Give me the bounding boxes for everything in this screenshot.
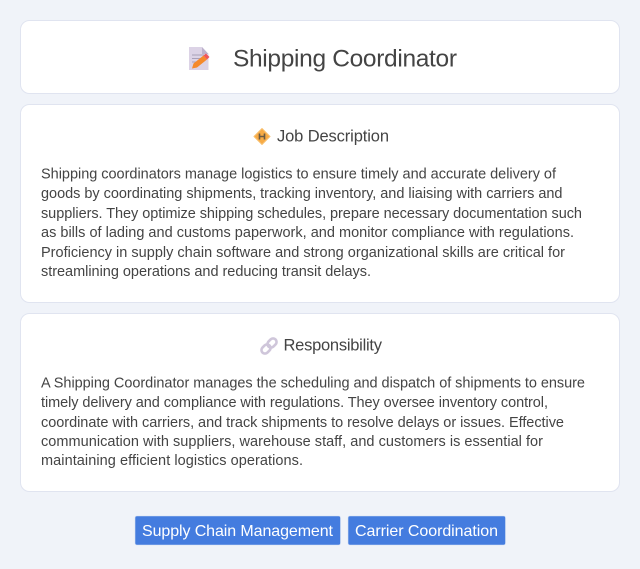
panel: responsibility bbox=[20, 314, 620, 492]
icon: chain link bbox=[260, 337, 278, 355]
text block: job description: goods by coordinating shipments, tracking inventory, and liaising with carriers and bbox=[41, 186, 562, 202]
text block: responsibility bbox=[41, 376, 585, 469]
text block: job description: Shipping coordinators manage logistics to ensure timely and accurate delivery of bbox=[41, 166, 557, 182]
text block: responsibility: coordinate with carriers, and track shipments to resolve delays or issues. Effective bbox=[41, 415, 564, 431]
text block: responsibility: communication with suppliers, warehouse staff, and customers is essential for bbox=[41, 434, 543, 450]
text block: job description bbox=[41, 166, 582, 280]
tag: Supply Chain Management: Supply Chain Management bbox=[142, 523, 334, 540]
panel: title bbox=[20, 20, 620, 94]
tag: Supply Chain Management bbox=[135, 516, 340, 545]
text block: responsibility: A Shipping Coordinator manages the scheduling and dispatch of shipments to ensure bbox=[41, 376, 585, 392]
tag: Carrier Coordination: Carrier Coordination bbox=[355, 523, 498, 540]
tag: Carrier Coordination bbox=[348, 516, 506, 545]
panel: job description bbox=[20, 104, 620, 302]
text block: job description: as bills of lading and customs paperwork, and monitor compliance with regulations. bbox=[41, 225, 574, 241]
heading: Responsibility: Responsibility bbox=[284, 336, 383, 354]
text block: job description: streamlining operations and reducing transit delays. bbox=[41, 264, 371, 280]
icon: road sign bbox=[254, 128, 270, 144]
text block: job description: Proficiency in supply chain software and strong organizational skills are critical for bbox=[41, 245, 565, 261]
heading: Job Description: Job Description bbox=[277, 128, 389, 146]
text block: job description: suppliers. They optimize shipping schedules, prepare necessary documentation such bbox=[41, 206, 582, 222]
icon: document with pencil bbox=[189, 47, 210, 70]
heading: Shipping Coordinator: Shipping Coordinator bbox=[233, 46, 457, 72]
text block: responsibility: maintaining efficient logistics operations. bbox=[41, 453, 303, 469]
text block: responsibility: timely delivery and compliance with regulations. They oversee inventory control, bbox=[41, 395, 548, 411]
